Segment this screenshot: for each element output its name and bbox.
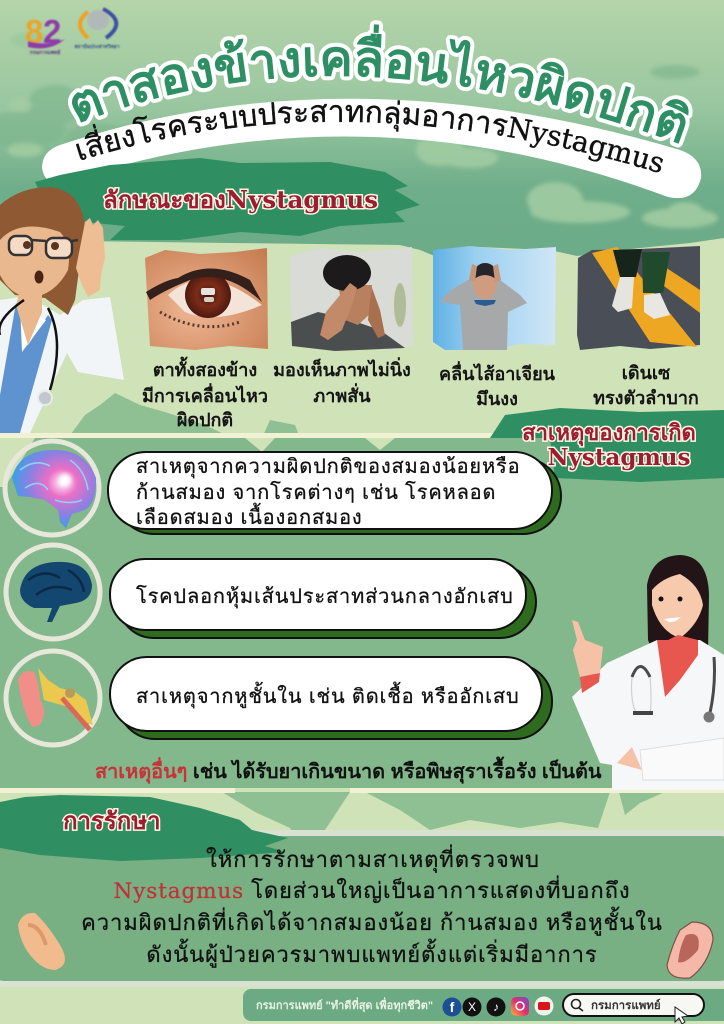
- pill 3 text: สาเหตุจากหูชั้นใน เช่น ติดเชื้อ หรืออักเสบ: [136, 682, 520, 709]
- cause row 1: [5, 441, 561, 535]
- search box: กรมการแพทย์: [591, 998, 661, 1012]
- pill 3 shadow: [118, 664, 552, 739]
- title: curved green line: ตาสองข้างเคลื่อนไหวผิดปกติ: [68, 20, 693, 148]
- doctor right: pointing hand: [572, 620, 603, 677]
- heading brush: causes: [490, 408, 724, 482]
- doctor right: cuff: [580, 673, 600, 693]
- pill 1 text: ก้านสมอง จากโรคต่างๆ เช่น โรคหลอด: [136, 481, 496, 504]
- background: light treatment band: [0, 788, 724, 1024]
- icon: left ear: [18, 913, 65, 970]
- caption 1: มีการเคลื่อนไหว: [142, 383, 268, 406]
- decorative clouds: [0, 32, 718, 228]
- treatment text: ดังนั้นผู้ป่วยควรมาพบแพทย์ตั้งแต่เริ่มมีอาการ: [146, 939, 598, 968]
- heading brush: symptoms: [35, 158, 420, 240]
- icon: facebook: [442, 998, 462, 1016]
- icon ring: ear anatomy: [6, 651, 100, 745]
- icon: x: [462, 998, 482, 1016]
- search box: [563, 994, 704, 1016]
- pill 1 shadow: [116, 458, 561, 534]
- other causes text: สาเหตุอื่นๆ เช่น ได้รับยาเกินขนาด หรือพิษสุราเรื้อรัง เป็นต้น: [95, 756, 602, 784]
- icon: colorful brain: [12, 450, 96, 528]
- icon: youtube: [534, 996, 554, 1016]
- treatment text: ความผิดปกติที่เกิดได้จากสมองน้อย ก้านสมอง หรือหูชั้นใน: [81, 907, 663, 936]
- icon: tiktok: ♪: [493, 1000, 499, 1014]
- treatment text: Nystagmus โดยส่วนใหญ่เป็นอาการแสดงที่บอกถึง: [114, 875, 630, 904]
- doctor left: coat: [0, 296, 124, 433]
- decorative texture at causes top: [0, 438, 395, 487]
- doctor left: glasses: [9, 236, 78, 258]
- panel outline: [0, 830, 724, 987]
- doctor left: scrubs: [0, 303, 52, 433]
- photo 4: walking feet: [577, 246, 700, 350]
- icon: instagram: [511, 997, 529, 1016]
- cause row 2: [6, 545, 536, 639]
- decorative cream divider lines: [0, 433, 724, 793]
- doctor right: face: [652, 574, 703, 638]
- pill 2 shadow: [118, 566, 536, 638]
- doctor right: hair: [647, 555, 709, 652]
- icon: blue brain: [20, 562, 92, 622]
- background: top sky: [0, 0, 724, 262]
- panel fill: [0, 836, 724, 981]
- doctor left: face: [0, 227, 69, 298]
- captions: [142, 356, 699, 430]
- doctor left: hair: [0, 187, 85, 315]
- icon ring: blue brain: [6, 545, 100, 639]
- doctor right: crossed arm: [617, 747, 642, 770]
- heading: causes: [522, 420, 696, 471]
- icon: right ear: [667, 922, 713, 978]
- title: curved black line: เสี่ยงโรคระบบประสาทกลุ่มอาการNystagmus: [76, 100, 663, 172]
- logos: [25, 9, 120, 56]
- treatment text: ให้การรักษาตามสาเหตุที่ตรวจพบ: [206, 844, 540, 873]
- doctor right: stethoscope: [632, 657, 714, 713]
- pill 3: [110, 657, 542, 731]
- caption 3: คลื่นไส้อาเจียน: [439, 361, 556, 384]
- heading: symptoms: ลักษณะของNystagmus: [103, 185, 378, 214]
- doctor left: [0, 187, 124, 433]
- doctor left: eyes and mouth: [23, 241, 31, 249]
- pill 2 text: โรคปลอกหุ้มเส้นประสาทส่วนกลางอักเสบ: [136, 585, 514, 609]
- doctor left: chest piece: [38, 391, 52, 405]
- doctor left: neck: [16, 290, 42, 345]
- icon: x: X: [468, 1000, 476, 1014]
- doctor right: collar shirt: [657, 635, 698, 697]
- pill 1 text: เลือดสมอง เนื้องอกสมอง: [136, 503, 363, 529]
- title banner: [42, 20, 702, 198]
- caption 1: ตาทั้งสองข้าง: [153, 356, 257, 380]
- treatment text: [81, 844, 663, 968]
- heading: treatment: การรักษา: [63, 808, 161, 835]
- logo: 82 anniversary: 8: [25, 13, 43, 50]
- doctor left: stethoscope: [0, 300, 57, 390]
- treatment panel: [0, 830, 724, 987]
- logo: 82 anniversary: กรมการแพทย์: [30, 49, 60, 56]
- pill 1 text: สาเหตุจากความผิดปกติของสมองน้อยหรือ: [136, 456, 520, 479]
- photo 1: eye: [145, 248, 268, 350]
- footer bar: [243, 989, 724, 1024]
- icon: facebook: f: [450, 999, 455, 1015]
- footer slogan: กรมการแพทย์ "ทำดีที่สุด เพื่อทุกชีวิต": [256, 997, 433, 1013]
- icon: tiktok: [486, 998, 506, 1016]
- logo: 82 anniversary: 2: [43, 13, 61, 50]
- photo 3: nausea man: [433, 246, 556, 350]
- decorative brush shapes in light band: [68, 393, 665, 846]
- icon: ear anatomy: [18, 668, 93, 730]
- title: white arch band: [42, 99, 701, 198]
- icon ring: colorful brain: [5, 441, 99, 535]
- pill 2: [110, 559, 526, 630]
- cause row 3: [6, 651, 552, 745]
- heading: causes: สาเหตุของการเกิด: [522, 420, 696, 447]
- icon: cursor: [675, 1007, 688, 1024]
- background: causes band: [0, 438, 724, 788]
- heading brush: treatment: [0, 795, 288, 861]
- doctor right: coat: [572, 640, 724, 790]
- background: light symptoms band: [0, 238, 724, 440]
- logo: neurological institute: สถาบันประสาทวิทยา: [74, 43, 120, 50]
- caption 2: ภาพสั่น: [313, 383, 371, 406]
- caption 1: ผิดปกติ: [176, 410, 233, 430]
- doctor right: eyes and smile: [658, 596, 664, 602]
- caption 4: ทรงตัวลำบาก: [593, 388, 699, 408]
- doctor left: hand: [76, 218, 105, 297]
- pill 1: [108, 452, 552, 529]
- caption 2: มองเห็นภาพไม่นิ่ง: [273, 357, 411, 380]
- logo: 82 anniversary: [25, 13, 65, 56]
- photo 2: headache man: [290, 247, 413, 351]
- caption 4: เดินเซ: [622, 363, 670, 383]
- caption 3: มึนงง: [476, 389, 518, 409]
- doctor right: [572, 555, 724, 790]
- heading: causes: Nystagmus: [548, 444, 690, 471]
